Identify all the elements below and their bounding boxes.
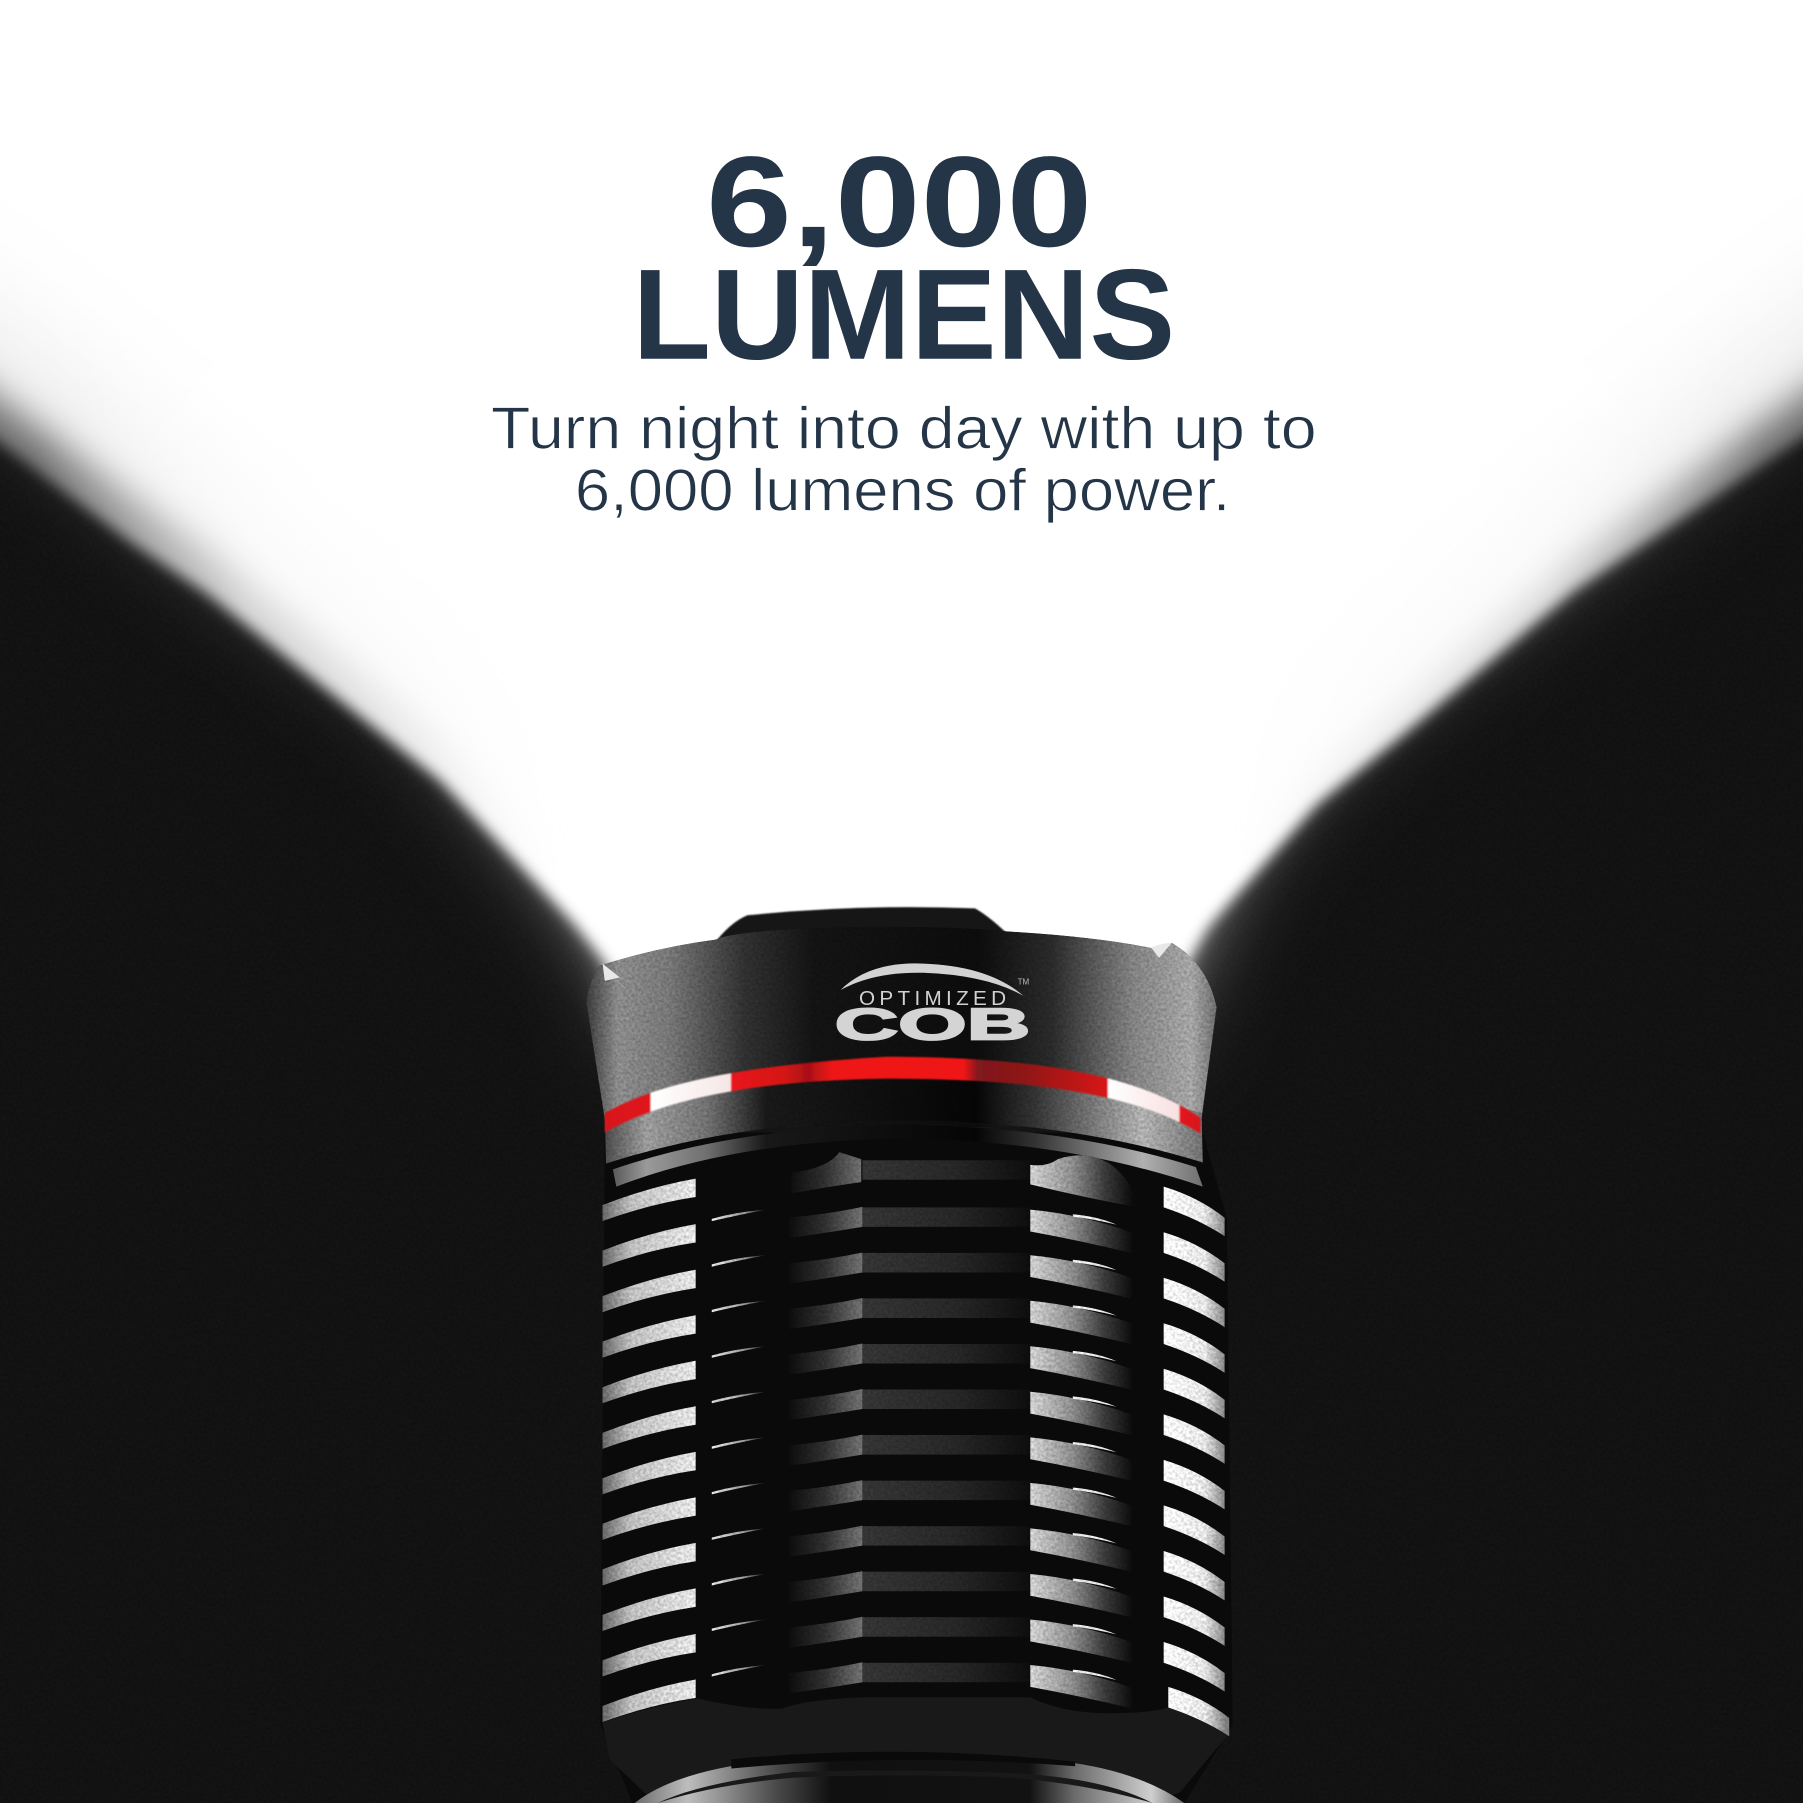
bezel notches — [603, 943, 1172, 981]
beam sharp outer edge — [0, 0, 1803, 1012]
body ribs — [603, 1152, 1229, 1736]
subtitle line 2: 6,000 lumens of power. — [575, 457, 1230, 524]
lower collar — [603, 1697, 1230, 1803]
subtitle — [491, 394, 1317, 524]
logo COB: COB — [835, 998, 1030, 1049]
head bezel — [586, 927, 1217, 1127]
logo arc — [841, 963, 1023, 996]
last right strip — [1168, 1687, 1229, 1736]
logo: Optimized COB — [835, 963, 1030, 1049]
flashlight — [586, 907, 1233, 1803]
bottom ring highlights — [635, 1757, 1184, 1803]
title line 2: LUMENS — [632, 243, 1175, 387]
last left strip — [603, 1680, 696, 1722]
red ring — [605, 1057, 1200, 1134]
collar below red ring — [605, 1074, 1203, 1164]
beam core — [0, 0, 1803, 1012]
light beam — [0, 0, 1803, 1012]
lens dome — [713, 907, 1012, 966]
title line 1: 6,000 — [706, 130, 1092, 274]
logo wordmark: OPTIMIZED — [859, 987, 1006, 1010]
trademark: TM — [1018, 977, 1030, 986]
first ribs at top of body — [791, 1152, 1138, 1207]
title — [632, 130, 1175, 387]
flashlight body silhouette — [600, 1133, 1233, 1803]
beam mid falloff — [0, 0, 1803, 1012]
second collar band — [613, 1125, 1203, 1187]
subtitle line 1: Turn night into day with up to — [491, 394, 1317, 461]
